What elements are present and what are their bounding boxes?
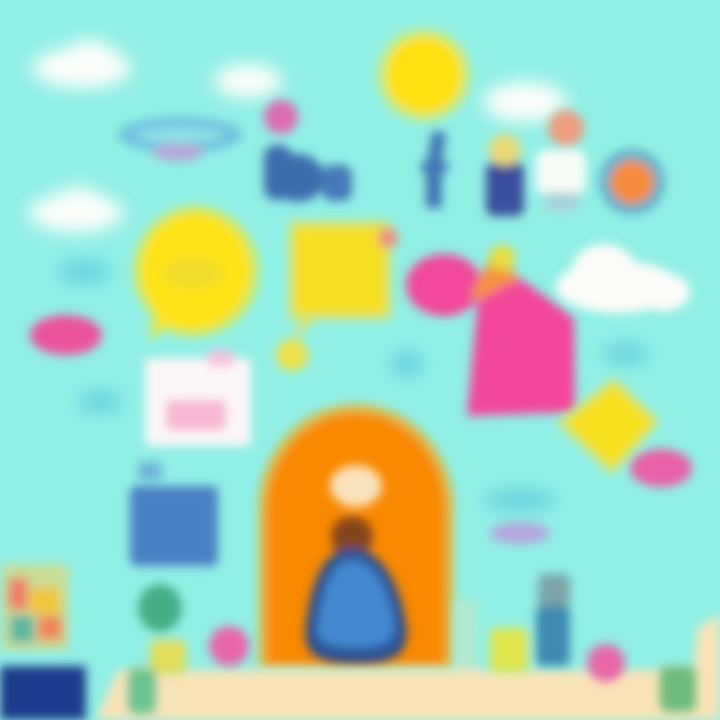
plants and small figures [128, 574, 696, 714]
white note panel [145, 350, 251, 446]
pink text tag [490, 522, 550, 544]
orange badge [599, 149, 665, 215]
blue panel [130, 462, 218, 566]
yellow square panel [276, 220, 398, 371]
title lettering [118, 100, 448, 208]
faint text marks [58, 262, 648, 509]
seated figure [305, 465, 407, 664]
yellow circle panel [133, 205, 259, 341]
book stack [2, 564, 68, 650]
yellow tilted panel [556, 377, 692, 487]
characters at top right [486, 110, 586, 216]
orange arch [258, 404, 454, 668]
pink cloud left [30, 315, 102, 355]
sandy ground [96, 600, 720, 720]
navy block [0, 666, 86, 720]
clouds [28, 40, 567, 232]
sun [377, 28, 471, 122]
pink callout shapes [406, 245, 575, 416]
white cloud panel [556, 244, 690, 313]
